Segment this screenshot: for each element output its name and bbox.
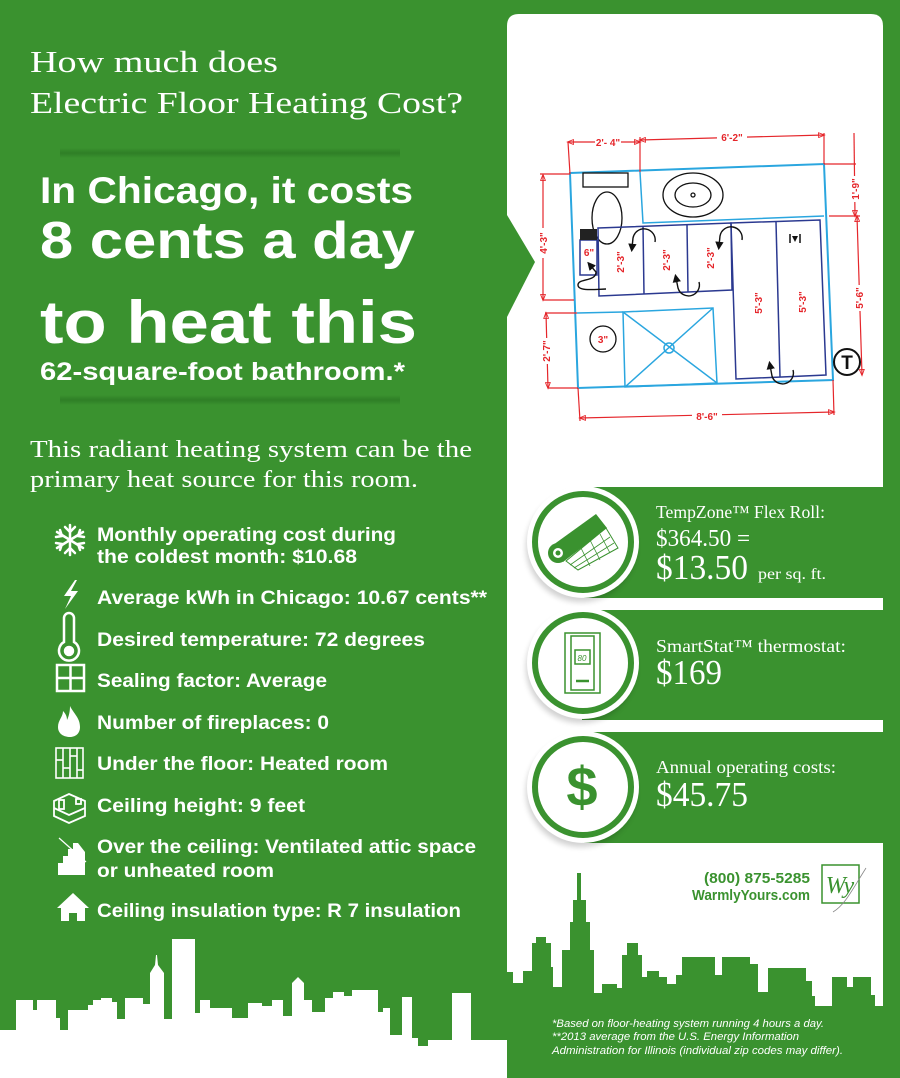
panel: annual operating costs: $45.75 <box>656 775 748 814</box>
logo <box>822 865 866 912</box>
title <box>30 44 463 120</box>
contact info <box>692 870 810 904</box>
headline: cost per day: to heat this <box>40 289 417 356</box>
icon: room cube <box>54 794 85 823</box>
icon: dollar sign: $ <box>566 755 598 818</box>
headline: cost per day: 62-square-foot bathroom.* <box>40 358 405 386</box>
icon: thermometer <box>59 613 79 661</box>
icon: thermostat: 80 <box>578 654 587 663</box>
arrows <box>578 227 793 384</box>
panel: Flex Roll cost: $364.50 = <box>656 526 750 552</box>
title: Electric Floor Heating Cost? <box>30 85 463 120</box>
floor plan: 2'-7" <box>542 340 553 362</box>
intro text <box>30 437 472 493</box>
icon: floor planks <box>56 748 83 778</box>
floor plan: 5'-3" <box>754 292 765 314</box>
contact info: (800) 875-5285 <box>704 870 810 887</box>
icon: stairs <box>58 838 86 875</box>
title: How much does <box>30 44 278 79</box>
list: room parameters: Sealing factor: Average <box>97 671 327 692</box>
list: room parameters: Under the floor: Heated room <box>97 754 388 775</box>
headline: cost per day <box>40 170 417 386</box>
icon: thermostat <box>565 633 600 693</box>
list: room parameters <box>54 525 488 922</box>
floor plan: 3" <box>598 335 608 346</box>
floor plan: 2'-3" <box>662 249 673 271</box>
shower <box>623 308 717 387</box>
icon: lightning <box>64 580 78 609</box>
floor plan: 4'-3" <box>539 232 550 254</box>
list: room parameters: Number of fireplaces: 0 <box>97 713 329 734</box>
panel: thermostat cost <box>526 607 883 723</box>
floor plan: 1'-9" <box>851 178 862 200</box>
floor plan: 8'-6" <box>696 412 718 423</box>
footnotes: *Based on floor-heating system running 4 hours a day. <box>552 1018 824 1030</box>
icon: roll of mesh <box>548 514 618 570</box>
fixtures <box>583 173 723 352</box>
list: room parameters: Ceiling height: 9 feet <box>97 796 306 817</box>
list: room parameters: Desired temperature: 72 degrees <box>97 630 425 651</box>
icon: window <box>57 665 84 691</box>
contact info: WarmlyYours.com <box>692 887 810 904</box>
panel: right white column <box>507 14 883 1078</box>
floor plan: 2'-3" <box>706 247 717 269</box>
headline: cost per day: In Chicago, it costs <box>40 170 413 211</box>
panel: Flex Roll cost <box>526 486 883 602</box>
intro text: primary heat source for this room. <box>30 467 418 493</box>
panel: Flex Roll cost: $13.50 <box>656 548 748 587</box>
list: room parameters: Monthly operating cost during <box>97 525 396 546</box>
list: room parameters: Over the ceiling: Ventilated attic space <box>97 837 476 858</box>
floor plan: 2'-3" <box>616 251 627 273</box>
floor plan <box>537 130 866 423</box>
headline: cost per day: 8 cents a day <box>40 212 415 270</box>
panel: thermostat cost: SmartStat™ thermostat: <box>656 636 846 656</box>
heating mats <box>580 220 826 379</box>
list: room parameters: Ceiling insulation type: R 7 insulation <box>97 901 461 922</box>
panel: annual operating costs <box>526 731 883 847</box>
floor plan: 6" <box>584 248 594 259</box>
skyline: right (green) <box>507 873 883 1078</box>
icon: house <box>57 893 89 921</box>
panel: Flex Roll cost: TempZone™ Flex Roll: <box>656 502 825 522</box>
list: room parameters: the coldest month: $10.68 <box>97 547 357 568</box>
footnotes: **2013 average from the U.S. Energy Information <box>552 1031 799 1043</box>
floor plan: 6'-2" <box>721 133 743 144</box>
thermostat T <box>834 349 860 375</box>
floor plan: 5'-6" <box>855 287 866 309</box>
icon: snowflake <box>56 525 84 555</box>
panel: Flex Roll cost: per sq. ft. <box>758 566 826 583</box>
intro text: This radiant heating system can be the <box>30 437 472 463</box>
floor plan: 2'- 4" <box>596 138 620 149</box>
panel: thermostat cost: $169 <box>656 653 722 692</box>
logo: Wy <box>826 873 855 899</box>
icon: flame <box>58 706 80 737</box>
floor plan: T <box>841 353 853 374</box>
skyline: left (white) <box>0 939 508 1078</box>
floor plan: 5'-3" <box>798 291 809 313</box>
footnotes: Administration for Illinois (individual zip codes may differ). <box>551 1045 843 1057</box>
panel: annual operating costs: Annual operating costs: <box>656 757 836 777</box>
outer walls <box>570 164 833 388</box>
footnotes <box>551 1018 843 1057</box>
list: room parameters: or unheated room <box>97 861 274 882</box>
dimensions <box>540 133 862 421</box>
list: room parameters: Average kWh in Chicago: 10.67 cents** <box>97 588 488 609</box>
